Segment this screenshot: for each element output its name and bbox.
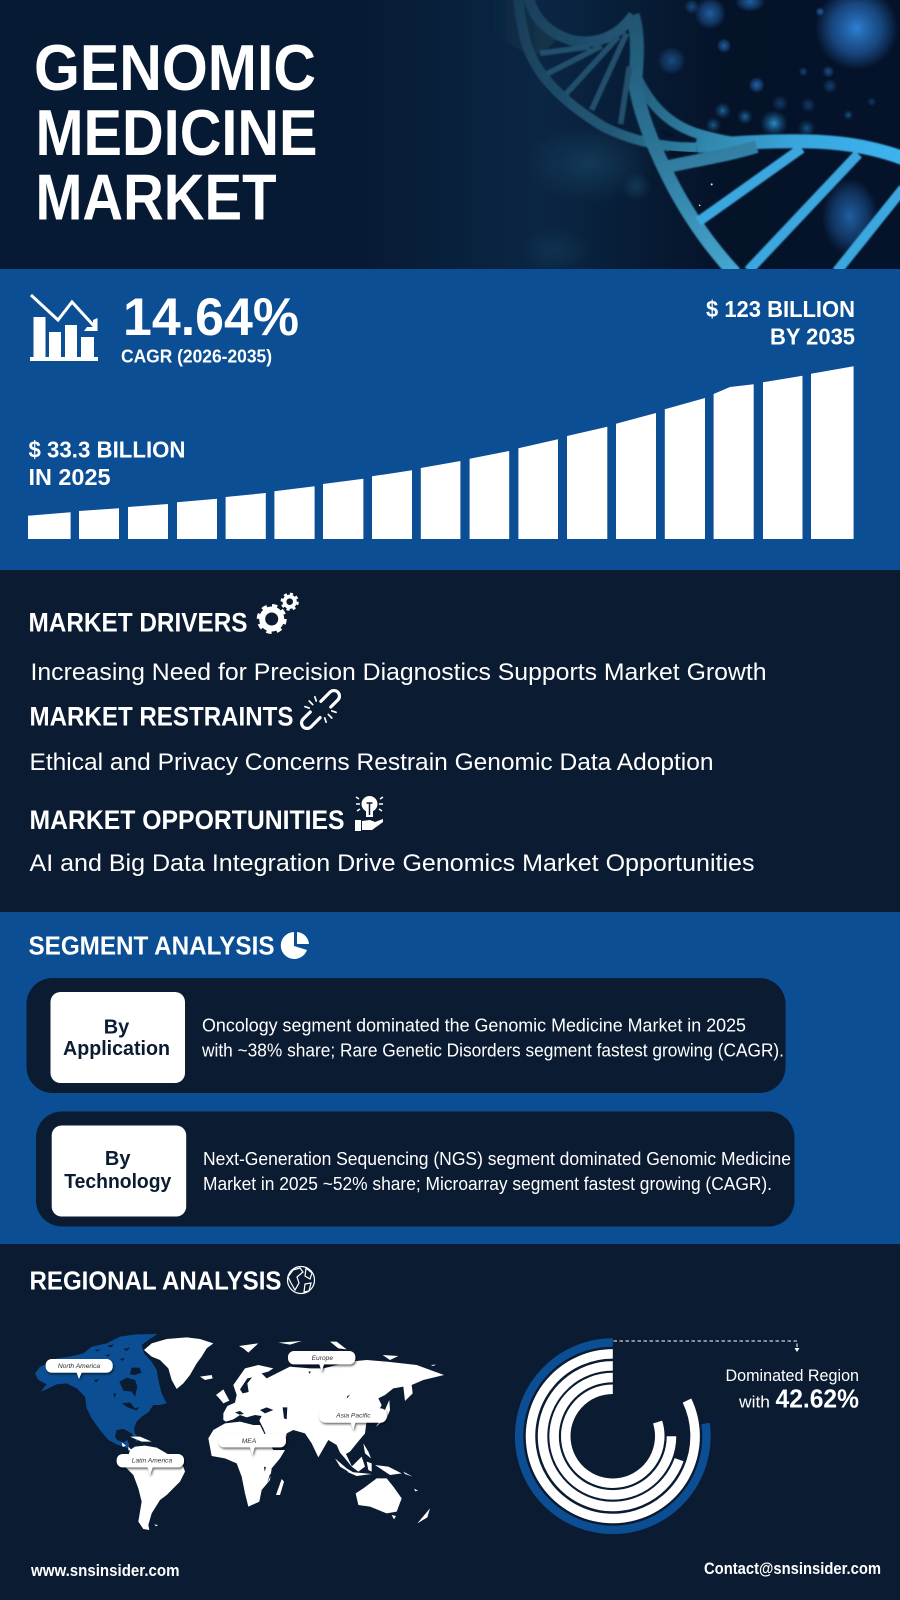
text: application: with ~38% share; Rare Genetic Disorders segment fastest growing (CAGR). [201, 1040, 784, 1060]
label: 2035 value [706, 296, 855, 350]
callout: North America [46, 1359, 113, 1379]
icon: pie chart [281, 932, 309, 959]
callout: Europe [288, 1351, 355, 1372]
radial chart [519, 1342, 706, 1530]
card: by application [26, 978, 786, 1093]
heading: market drivers: MARKET DRIVERS [28, 608, 248, 638]
callout: dominated region [726, 1367, 859, 1414]
icon: globe [288, 1266, 314, 1294]
stat: CAGR: CAGR (2026-2035) [121, 346, 272, 366]
text: application [201, 1014, 784, 1060]
image: DNA helix with particles [490, 0, 900, 273]
callout: Latin America [117, 1454, 184, 1475]
text: technology: Next-Generation Sequencing (NGS) segment dominated Genomic Medicine [203, 1148, 791, 1169]
map callouts [46, 1351, 387, 1475]
callout: North America: North America [58, 1363, 100, 1370]
heading: market restraints: MARKET RESTRAINTS [30, 702, 294, 732]
title: MARKET [36, 162, 276, 234]
heading: regional analysis: REGIONAL ANALYSIS [30, 1266, 282, 1296]
icon: broken chain link [293, 682, 348, 737]
label: 2025 value: $ 33.3 BILLION [28, 436, 186, 462]
callout: Europe: Europe [312, 1355, 333, 1362]
label box: by technology: Technology [64, 1171, 172, 1193]
label: 2035 value: $ 123 BILLION [706, 296, 855, 322]
callout: dominated region: Dominated Region [726, 1367, 859, 1385]
callout: dominated region: 42.62% [776, 1386, 859, 1414]
panel: header [0, 0, 900, 273]
card: by technology [36, 1112, 794, 1226]
panel: regional analysis [0, 1244, 900, 1600]
text: driver: Increasing Need for Precision Diagnostics Supports Market Growth [30, 659, 766, 686]
label box: by application [50, 992, 185, 1083]
world map [35, 1334, 444, 1530]
text: opportunity: AI and Big Data Integration Drive Genomics Market Opportunities [30, 850, 754, 877]
label: 2025 value: IN 2025 [28, 464, 111, 490]
text: technology [203, 1148, 791, 1194]
icon: lightbulb in hand [355, 796, 383, 831]
text: application: Oncology segment dominated the Genomic Medicine Market in 2025 [202, 1014, 746, 1036]
footer: website: www.snsinsider.com [30, 1561, 180, 1580]
region: Eurasia, Africa, Oceania [208, 1341, 444, 1523]
title: MEDICINE [36, 97, 318, 169]
label: 2025 value [28, 436, 186, 490]
panel: drivers, restraints, opportunities [0, 570, 900, 912]
panel: market growth [0, 269, 900, 570]
icon: chart with trend arrow [30, 295, 98, 361]
label box: by technology [52, 1126, 186, 1216]
region: Greenland and South America [122, 1337, 213, 1530]
title [34, 32, 318, 234]
label box: by application: By [104, 1016, 130, 1038]
text: technology: Market in 2025 ~52% share; Microarray segment fastest growing (CAGR). [203, 1173, 772, 1194]
callout: Asia Pacific: Asia Pacific [335, 1413, 371, 1420]
callout: dominated region: with [738, 1394, 770, 1412]
heading: segment analysis: SEGMENT ANALYSIS [28, 930, 274, 960]
text: restraint: Ethical and Privacy Concerns Restrain Genomic Data Adoption [30, 749, 713, 776]
dashed leader arrow [614, 1341, 800, 1352]
callout: MEA: MEA [242, 1438, 257, 1445]
icon: gears [259, 594, 298, 632]
label box: by application: Application [63, 1038, 170, 1060]
bar chart [28, 366, 854, 539]
heading: market opportunities: MARKET OPPORTUNITIES [30, 805, 344, 835]
label box: by technology: By [105, 1148, 131, 1170]
callout: Latin America: Latin America [132, 1458, 173, 1465]
panel: segment analysis [0, 912, 900, 1244]
callout: MEA [218, 1434, 286, 1455]
label: 2035 value: BY 2035 [770, 324, 855, 350]
stat: CAGR: 14.64% [123, 288, 299, 347]
region: North America [35, 1334, 167, 1448]
callout: Asia Pacific [319, 1408, 387, 1430]
title: GENOMIC [34, 32, 316, 104]
